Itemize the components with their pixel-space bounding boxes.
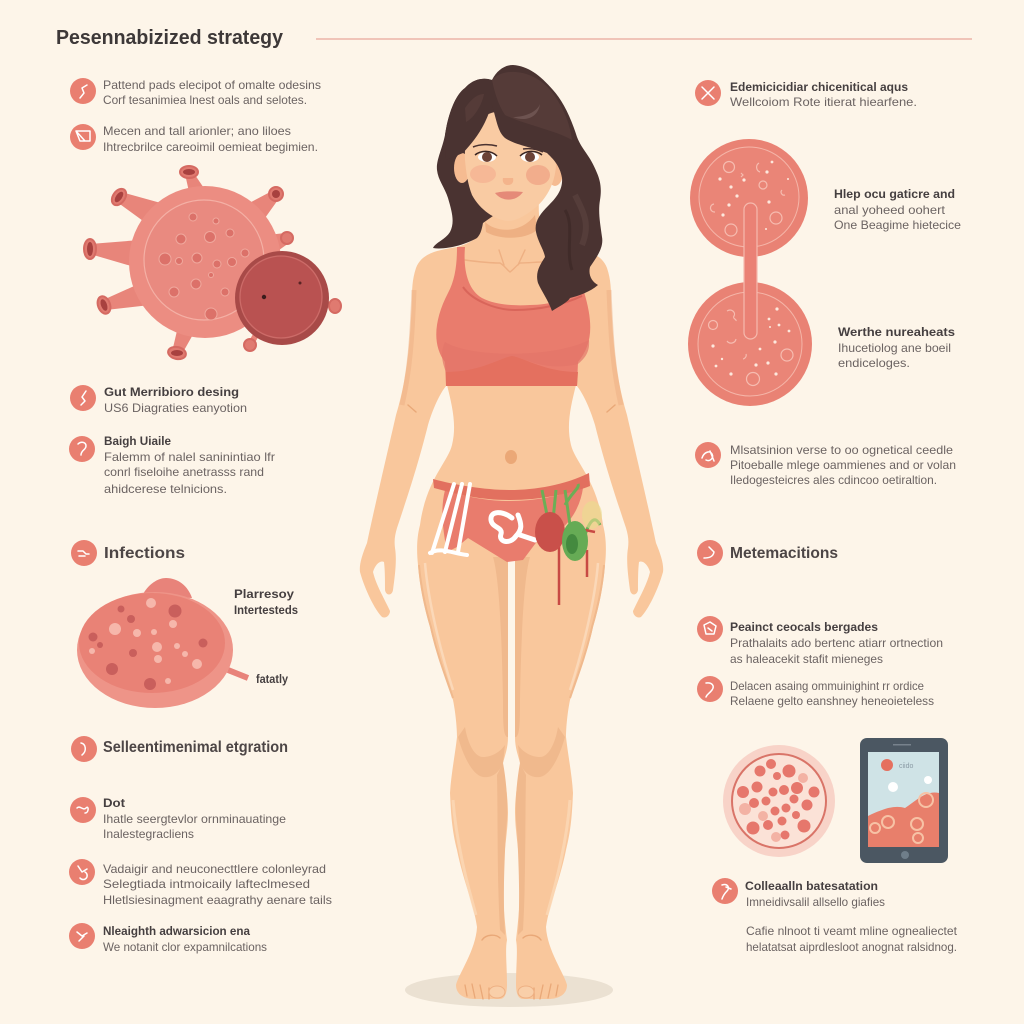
- icon: infections: [71, 540, 97, 566]
- connector tube: [744, 203, 757, 339]
- tablet illustration: ciido: [899, 763, 914, 770]
- text block: gut microbiome: Gut Merribioro desing: [104, 385, 239, 399]
- infected tissue illustration: [77, 578, 248, 708]
- cell caption: bottom: [838, 325, 955, 370]
- section: sentimental integration: We notanit clor expamnilcations: [103, 940, 267, 954]
- text block: patient notes: [70, 78, 321, 154]
- icon: diet: [70, 797, 96, 823]
- icon: pathway: [697, 676, 723, 702]
- text block: gut microbiome: Baigh Uiaile: [104, 434, 171, 448]
- cell pair diagram: [688, 139, 812, 406]
- cell caption: top: anal yoheed oohert: [834, 203, 946, 217]
- hair back: [433, 70, 530, 248]
- white stripes: [430, 484, 535, 555]
- text block: endocrine notes: Wellcoiom Rote itierat hiearfene.: [730, 95, 917, 109]
- body: [360, 195, 663, 999]
- hair front: [445, 65, 602, 311]
- callout labels: [234, 587, 298, 686]
- virus illustration: [84, 166, 341, 361]
- title: Pesennabizized strategy: [56, 27, 284, 49]
- text block: gut microbiome: US6 Diagraties eanyotion: [104, 401, 247, 415]
- section: metastasis: Relaene gelto eanshney heneoieteless: [730, 694, 934, 708]
- top cell: [690, 139, 808, 257]
- shorts: [433, 473, 590, 562]
- cell caption: bottom: Ihucetiolog ane boeil: [838, 341, 951, 355]
- section: metastasis: [697, 540, 943, 708]
- text block: endocrine notes: [695, 80, 917, 109]
- section: infections: [71, 540, 298, 708]
- section: metastasis: Prathalaits ado bertenc atiarr ortnection: [730, 636, 943, 650]
- navel: [505, 450, 517, 464]
- text block: gut microbiome: Falemm of nalel saninintiao lfr: [104, 450, 275, 464]
- icon: metastasis: [697, 540, 723, 566]
- ground shadow: [405, 973, 613, 1007]
- text block: patient notes: Mecen and tall arionler; ano liloes: [103, 124, 291, 138]
- text block: collaboration: Cafie nlnoot ti veamt mline ognealiectet: [746, 924, 958, 938]
- icon: patient: [70, 78, 96, 104]
- nose: [503, 178, 513, 185]
- callout labels: Plarresoy: [234, 587, 294, 601]
- section: infections: Infections: [104, 545, 185, 562]
- section: sentimental integration: [69, 736, 332, 954]
- text block: collaboration: helatatsat aiprdlesloot anognat ralsidnog.: [746, 940, 957, 954]
- cell caption: top: [834, 187, 961, 232]
- bottom cell: [688, 282, 812, 406]
- icon: clinic: [697, 616, 723, 642]
- section: sentimental integration: Vadaigir and neuconecttlere colonleyrad: [103, 862, 326, 876]
- petri dish illustration: [723, 745, 835, 857]
- icon: integration: [71, 736, 97, 762]
- section: metastasis: as haleacekit stafit mieneges: [730, 652, 883, 666]
- section: metastasis: Delacen asaing ommuinighint rr ordice: [730, 679, 924, 693]
- cell caption: bottom: endiceloges.: [838, 356, 910, 370]
- text block: collaboration: [712, 878, 958, 954]
- icon: chart: [70, 124, 96, 150]
- icon: weight: [69, 436, 95, 462]
- icon: vitamin: [69, 859, 95, 885]
- text block: patient notes: Ihtrecbrilce careoimil oemieat begimien.: [103, 140, 318, 154]
- icon: weight management: [69, 923, 95, 949]
- text block: collaboration: Imneidivsalil allsello giafies: [746, 895, 885, 909]
- eyes: [473, 145, 543, 162]
- collarbone lines: [465, 250, 543, 272]
- text block: patient notes: Corf tesanimiea lnest oals and selotes.: [103, 93, 307, 107]
- section: sentimental integration: Hletlsiesinagment eaagrathy aenare tails: [103, 893, 332, 907]
- section: sentimental integration: Selleentimenimal etgration: [103, 739, 288, 756]
- section: sentimental integration: Inalestegracliens: [103, 827, 194, 841]
- icon: mitigation: [695, 442, 721, 468]
- text block: mitigation: Mlsatsinion verse to oo ognetical ceedle: [730, 443, 953, 457]
- text block: gut microbiome: [69, 385, 275, 496]
- lips: [495, 191, 523, 200]
- text block: collaboration: Colleaalln batesatation: [745, 879, 878, 893]
- bra: [436, 247, 590, 386]
- head: [454, 112, 563, 221]
- text block: mitigation: Pitoeballe mlege oammienes and or volan: [730, 458, 956, 472]
- icon: collaboration: [712, 878, 738, 904]
- tablet illustration: [860, 738, 948, 863]
- section: sentimental integration: Ihatle seergtevlor ornminauatinge: [103, 812, 286, 826]
- cell caption: bottom: Werthe nureaheats: [838, 325, 955, 339]
- body shading: [402, 290, 621, 999]
- cell caption: top: Hlep ocu gaticre and: [834, 187, 955, 201]
- section: metastasis: Peainct ceocals bergades: [730, 620, 878, 634]
- icon: gut: [70, 385, 96, 411]
- organ illustration: red and green: [535, 484, 602, 605]
- section: sentimental integration: Dot: [103, 796, 125, 810]
- text block: patient notes: Pattend pads elecipot of omalte odesins: [103, 78, 321, 92]
- callout labels: fatatly: [256, 672, 288, 686]
- text block: mitigation: [695, 442, 956, 487]
- neck shadow: [485, 215, 537, 238]
- central figure: [360, 65, 663, 999]
- text block: mitigation: Iledogesteicres ales cdincoo oetiraltion.: [730, 473, 937, 487]
- section: sentimental integration: Selegtiada intmoicaily lafteclmesed: [103, 877, 310, 891]
- section: metastasis: Metemacitions: [730, 545, 838, 562]
- cell caption: top: One Beagime hietecice: [834, 218, 961, 232]
- text block: gut microbiome: conrl fiseloihe anetrasss rand: [104, 465, 264, 479]
- section: sentimental integration: Nleaighth adwarsicion ena: [103, 924, 250, 938]
- text block: endocrine notes: Edemicicidiar chicenitical aqus: [730, 80, 908, 94]
- text block: gut microbiome: ahidcerese telnicions.: [104, 482, 227, 496]
- icon: cross: [695, 80, 721, 106]
- callout labels: Intertesteds: [234, 603, 298, 617]
